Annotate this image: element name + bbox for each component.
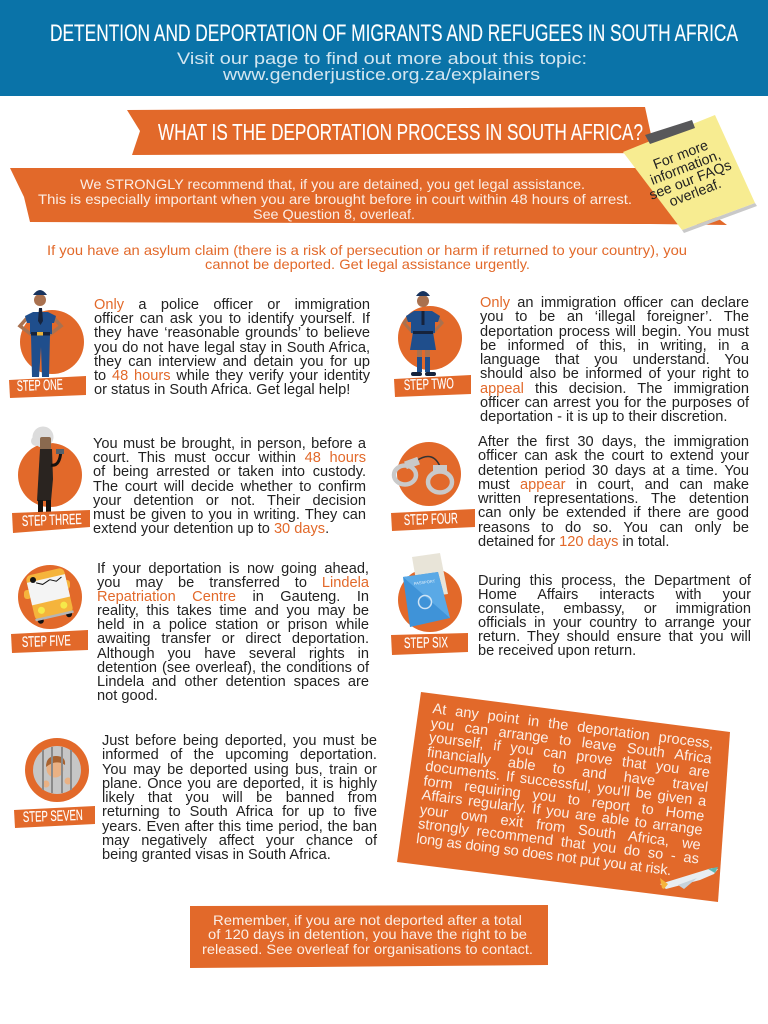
callout text: your own exit from South Africa, we	[419, 802, 702, 853]
text: returning to South Africa for up to five	[102, 804, 377, 820]
callout text: At any point in the deportation process,	[432, 702, 714, 752]
step one	[9, 290, 384, 402]
step four	[391, 435, 763, 555]
recommendation banner	[10, 168, 727, 225]
text: detained for 120 days in total.	[478, 534, 669, 550]
heading banner	[127, 107, 655, 155]
step six	[391, 553, 763, 664]
callout text: form requiring you to report to Home	[423, 773, 705, 824]
label: STEP FIVE	[22, 632, 71, 651]
text: court. This must occur within 48 hours	[93, 450, 366, 466]
text: officer can ask the court to extend your	[478, 448, 749, 464]
text: written representations. The detention	[478, 491, 749, 507]
text: Repatriation Centre in Gauteng. In	[97, 589, 369, 605]
text: detention period 30 days at a time. You	[478, 463, 749, 479]
callout text: long as doing so does not put you at risk.	[415, 831, 672, 879]
text: may negatively affect your chance of	[102, 833, 377, 849]
icon: police officer	[20, 290, 84, 377]
text: must appear in court, and can make	[478, 477, 749, 493]
callout text	[414, 702, 726, 893]
text	[94, 298, 384, 402]
note text	[637, 132, 739, 216]
icon: female officer	[398, 291, 462, 376]
asylum warning: If you have an asylum claim (there is a risk of persecution or harm if returned to your country), you	[47, 242, 687, 258]
text	[102, 734, 387, 868]
label	[391, 633, 468, 655]
text: return. They should ensure that you will	[478, 629, 751, 645]
text: must be given to you in writing. They can	[93, 507, 366, 523]
reminder box	[190, 905, 548, 968]
reminder box: released. See overleaf for organisations to contact.	[202, 941, 533, 957]
label	[11, 630, 88, 653]
text: consulate, embassy, or immigration	[478, 601, 751, 617]
text: You may be deported using bus, train or	[102, 762, 377, 778]
note text: see our FAQs	[647, 158, 734, 204]
icon: passport	[398, 553, 462, 632]
text: or status in South Africa. Get legal help!	[94, 382, 350, 398]
text: deportation process will begin. You must	[480, 324, 749, 340]
text: held in a police station or prison while	[97, 617, 369, 633]
recommendation banner: We STRONGLY recommend that, if you are detained, you get legal assistance.	[80, 176, 585, 192]
text: language that you understand. You	[480, 352, 749, 368]
tape	[645, 120, 695, 144]
text: to 48 hours while they verify your identity	[94, 368, 370, 384]
icon: person behind bars	[25, 738, 89, 802]
label: STEP SEVEN	[23, 807, 83, 826]
icon: handcuffs	[394, 442, 461, 506]
text: your detention or not. Their decision	[93, 493, 366, 509]
text: Lindela and other detention spaces are	[97, 674, 369, 690]
step seven	[14, 734, 387, 868]
recommendation banner: This is especially important when you are brought before in court within 48 hours of arrest.	[38, 191, 632, 207]
text	[97, 562, 382, 708]
text: be informed of this, in writing, in a	[480, 338, 749, 354]
text: be received upon return.	[478, 643, 636, 659]
note text: For more	[651, 138, 711, 173]
icon: airplane	[660, 867, 718, 889]
label: STEP SIX	[404, 634, 448, 652]
callout text: strongly recommend that you do so - as	[417, 816, 700, 868]
label: STEP ONE	[17, 376, 63, 395]
text: you do not have legal stay in South Africa,	[94, 340, 370, 356]
text: Home Affairs interacts with your	[478, 587, 751, 603]
text: you may be transferred to Lindela	[97, 575, 369, 591]
text	[478, 435, 763, 555]
label: STEP TWO	[404, 375, 454, 394]
note text: overleaf.	[667, 176, 724, 210]
text: can only be extended if there are good	[478, 505, 749, 521]
text: officer can ask you to identify yourself. If	[94, 311, 370, 327]
callout text: financially able to and have travel	[426, 744, 709, 796]
text: likely that you will be banned from	[102, 790, 377, 806]
text: they have ‘reasonable grounds’ to believe	[94, 325, 370, 341]
step two	[394, 291, 760, 430]
text: The court will decide whether to confirm	[93, 479, 366, 495]
text: being granted visas in South Africa.	[102, 847, 331, 863]
text: awaiting transfer or direct deportation.	[97, 631, 369, 647]
reminder box: Remember, if you are not deported after a total	[213, 912, 522, 928]
text: reality, this takes time and you may be	[97, 603, 369, 619]
callout text: yourself, if you can prove that you are	[428, 730, 711, 781]
icon: bus	[18, 565, 82, 629]
header link text: www.genderjustice.org.za/explainers	[222, 66, 540, 84]
step five	[11, 562, 382, 708]
sticky note	[623, 115, 757, 233]
label	[14, 806, 95, 828]
text: officials in your country to arrange your	[478, 615, 751, 631]
label	[391, 509, 475, 531]
step three	[12, 426, 378, 541]
text	[480, 296, 760, 430]
label: STEP FOUR	[404, 510, 458, 529]
text	[93, 437, 378, 541]
asylum warning: cannot be deported. Get legal assistance urgently.	[205, 256, 530, 272]
header band	[0, 0, 768, 96]
icon: passport: PASSPORT	[414, 578, 436, 586]
label	[12, 510, 90, 533]
text: Although you have several rights in	[97, 646, 369, 662]
reminder box: of 120 days in detention, you have the right to be	[208, 926, 527, 942]
callout text: documents. If successful, you'll be given a	[424, 759, 707, 810]
callout text: Affairs regularly. If you are able to arrange	[421, 787, 703, 839]
note text: information,	[648, 147, 723, 189]
text: extend your detention up to 30 days.	[93, 521, 329, 537]
text: you to be an ‘illegal foreigner’. The	[480, 309, 749, 325]
callout text: you can arrange to leave South Africa	[430, 715, 713, 767]
callout: leaving voluntarily	[397, 692, 730, 902]
label: STEP THREE	[22, 511, 82, 530]
text: plane. Once you are deported, it is highly	[102, 776, 377, 792]
asylum warning	[47, 242, 687, 272]
text	[478, 574, 763, 664]
text: deportation - it is up to their discretion.	[480, 409, 727, 425]
recommendation banner: See Question 8, overleaf.	[253, 206, 415, 222]
text: years. Even after this time period, the ban	[102, 818, 377, 834]
header link text	[177, 50, 587, 84]
text: detention (see overleaf), the conditions of	[97, 660, 369, 676]
icon: judge	[18, 426, 82, 514]
text: of being arrested or taken into custody.	[93, 464, 366, 480]
text: they can interview and detain you for up	[94, 354, 370, 370]
text: reasons to do so. You can only be	[478, 520, 749, 536]
text: informed of the upcoming deportation.	[102, 747, 377, 763]
text: should also be informed of your right to	[480, 366, 749, 382]
label	[394, 375, 471, 397]
text: appeal this decision. The immigration	[480, 380, 749, 396]
header link text: Visit our page to find out more about this topic:	[177, 50, 587, 68]
text: not good.	[97, 688, 158, 704]
text: officer can arrest you for the purposes of	[480, 395, 749, 411]
